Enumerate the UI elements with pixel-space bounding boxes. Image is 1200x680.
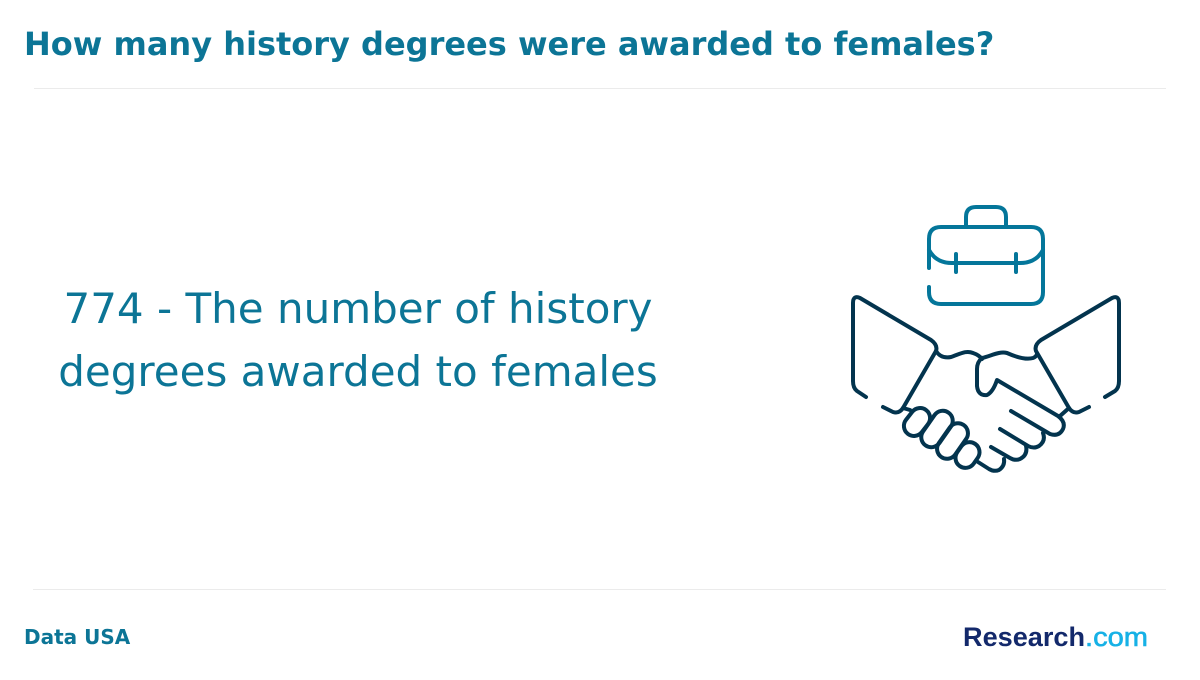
main statement: 774 - The number of history [63, 284, 653, 333]
main statement [58, 284, 658, 396]
icon: briefcase [929, 207, 1043, 304]
logo: Research.com: Research [963, 622, 1085, 652]
icon: handshake [853, 297, 1119, 472]
finger 2 [917, 407, 957, 451]
logo: Research.com: .com [1085, 622, 1148, 652]
main statement: degrees awarded to females [58, 347, 658, 396]
title: How many history degrees were awarded to females? [24, 25, 994, 63]
source label: Data USA [24, 625, 130, 649]
icon: handshake with briefcase [851, 205, 1121, 473]
finger 4 [952, 438, 983, 472]
logo: Research.com [963, 622, 1148, 652]
finger 3 [933, 419, 972, 463]
finger 1 [900, 404, 934, 440]
